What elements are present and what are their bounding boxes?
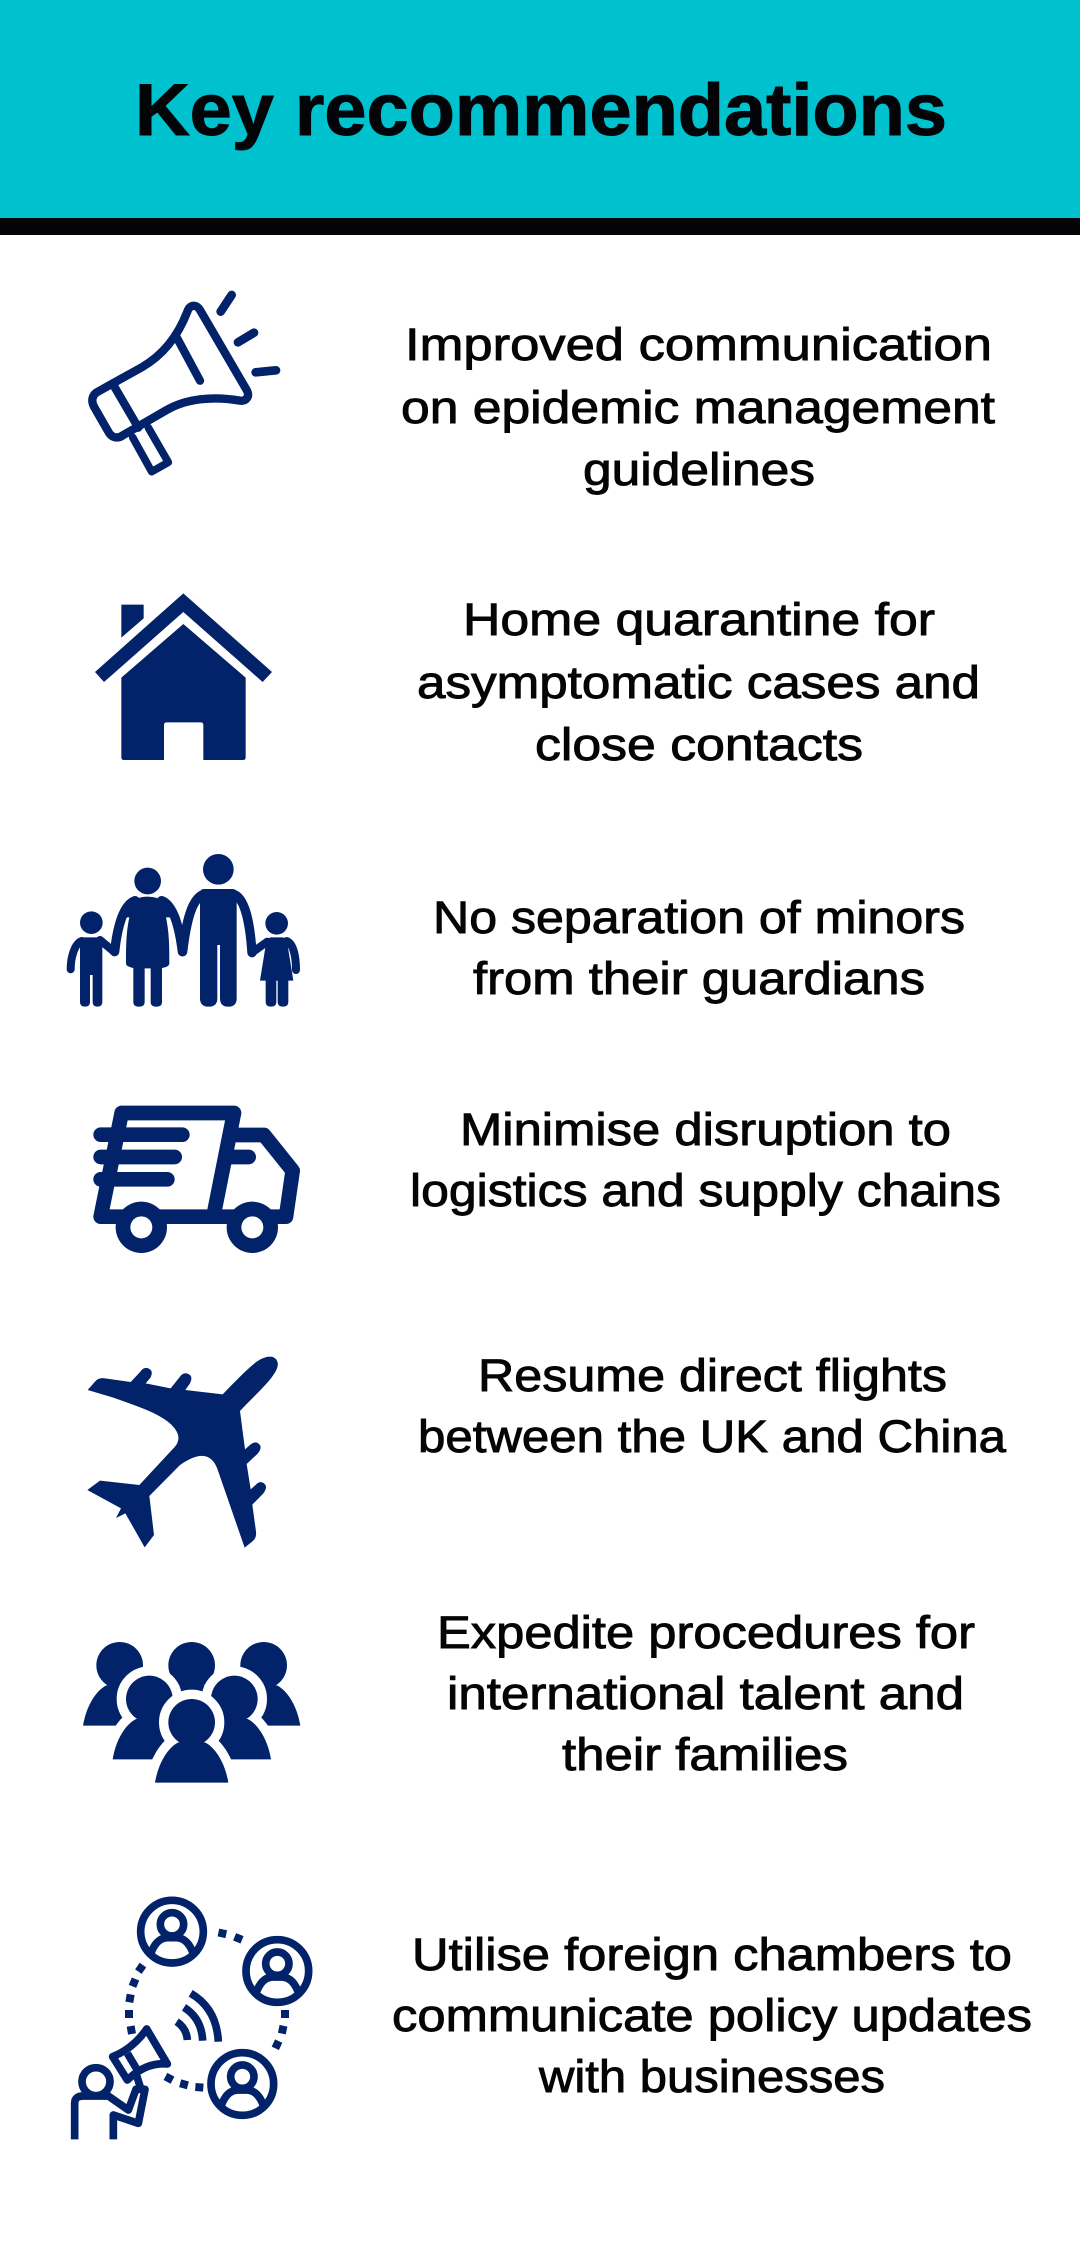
icon: group of people <box>83 1642 300 1783</box>
row 3: family <box>71 854 965 1007</box>
text: flights: Resume direct flights <box>478 1350 947 1401</box>
text: communication: guidelines <box>583 444 815 495</box>
row 6: talent <box>83 1607 975 1783</box>
row 4: logistics <box>101 1104 1001 1253</box>
row 2: home quarantine <box>95 593 980 770</box>
text: talent: international talent and <box>447 1668 964 1719</box>
icon: delivery truck <box>101 1113 293 1253</box>
text: minors: No separation of minors <box>433 892 965 943</box>
text: chambers: communicate policy updates <box>392 1990 1032 2041</box>
text: talent: their families <box>562 1729 848 1780</box>
text: communication: Improved communication <box>405 319 992 370</box>
title: Key recommendations <box>135 70 947 151</box>
icon: family <box>71 854 296 1007</box>
text: flights <box>418 1350 1007 1462</box>
text: communication <box>401 319 996 495</box>
row 1: communication <box>92 295 996 495</box>
text: home quarantine: close contacts <box>535 719 863 770</box>
text: minors: from their guardians <box>473 953 925 1004</box>
text: home quarantine: asymptomatic cases and <box>417 657 980 708</box>
text: flights: between the UK and China <box>418 1411 1007 1462</box>
text: home quarantine <box>417 594 980 770</box>
text: logistics: Minimise disruption to <box>460 1104 951 1155</box>
text: logistics: logistics and supply chains <box>410 1165 1001 1216</box>
header band <box>0 0 1080 235</box>
text: talent: Expedite procedures for <box>437 1607 975 1658</box>
text: chambers: Utilise foreign chambers to <box>412 1929 1012 1980</box>
icon: house <box>95 593 272 760</box>
text: talent <box>437 1607 975 1780</box>
text: chambers: with businesses <box>538 2051 885 2102</box>
text: minors <box>433 892 965 1004</box>
icon: network with megaphone <box>75 1900 309 2139</box>
row 5: flights <box>87 1350 1007 1548</box>
text: communication: on epidemic management <box>401 382 996 433</box>
row 7: chambers <box>75 1900 1032 2139</box>
text: chambers <box>392 1929 1032 2102</box>
icon: megaphone <box>92 295 276 472</box>
icon: airplane <box>87 1357 278 1548</box>
text: logistics <box>410 1104 1001 1216</box>
text: home quarantine: Home quarantine for <box>463 594 935 645</box>
